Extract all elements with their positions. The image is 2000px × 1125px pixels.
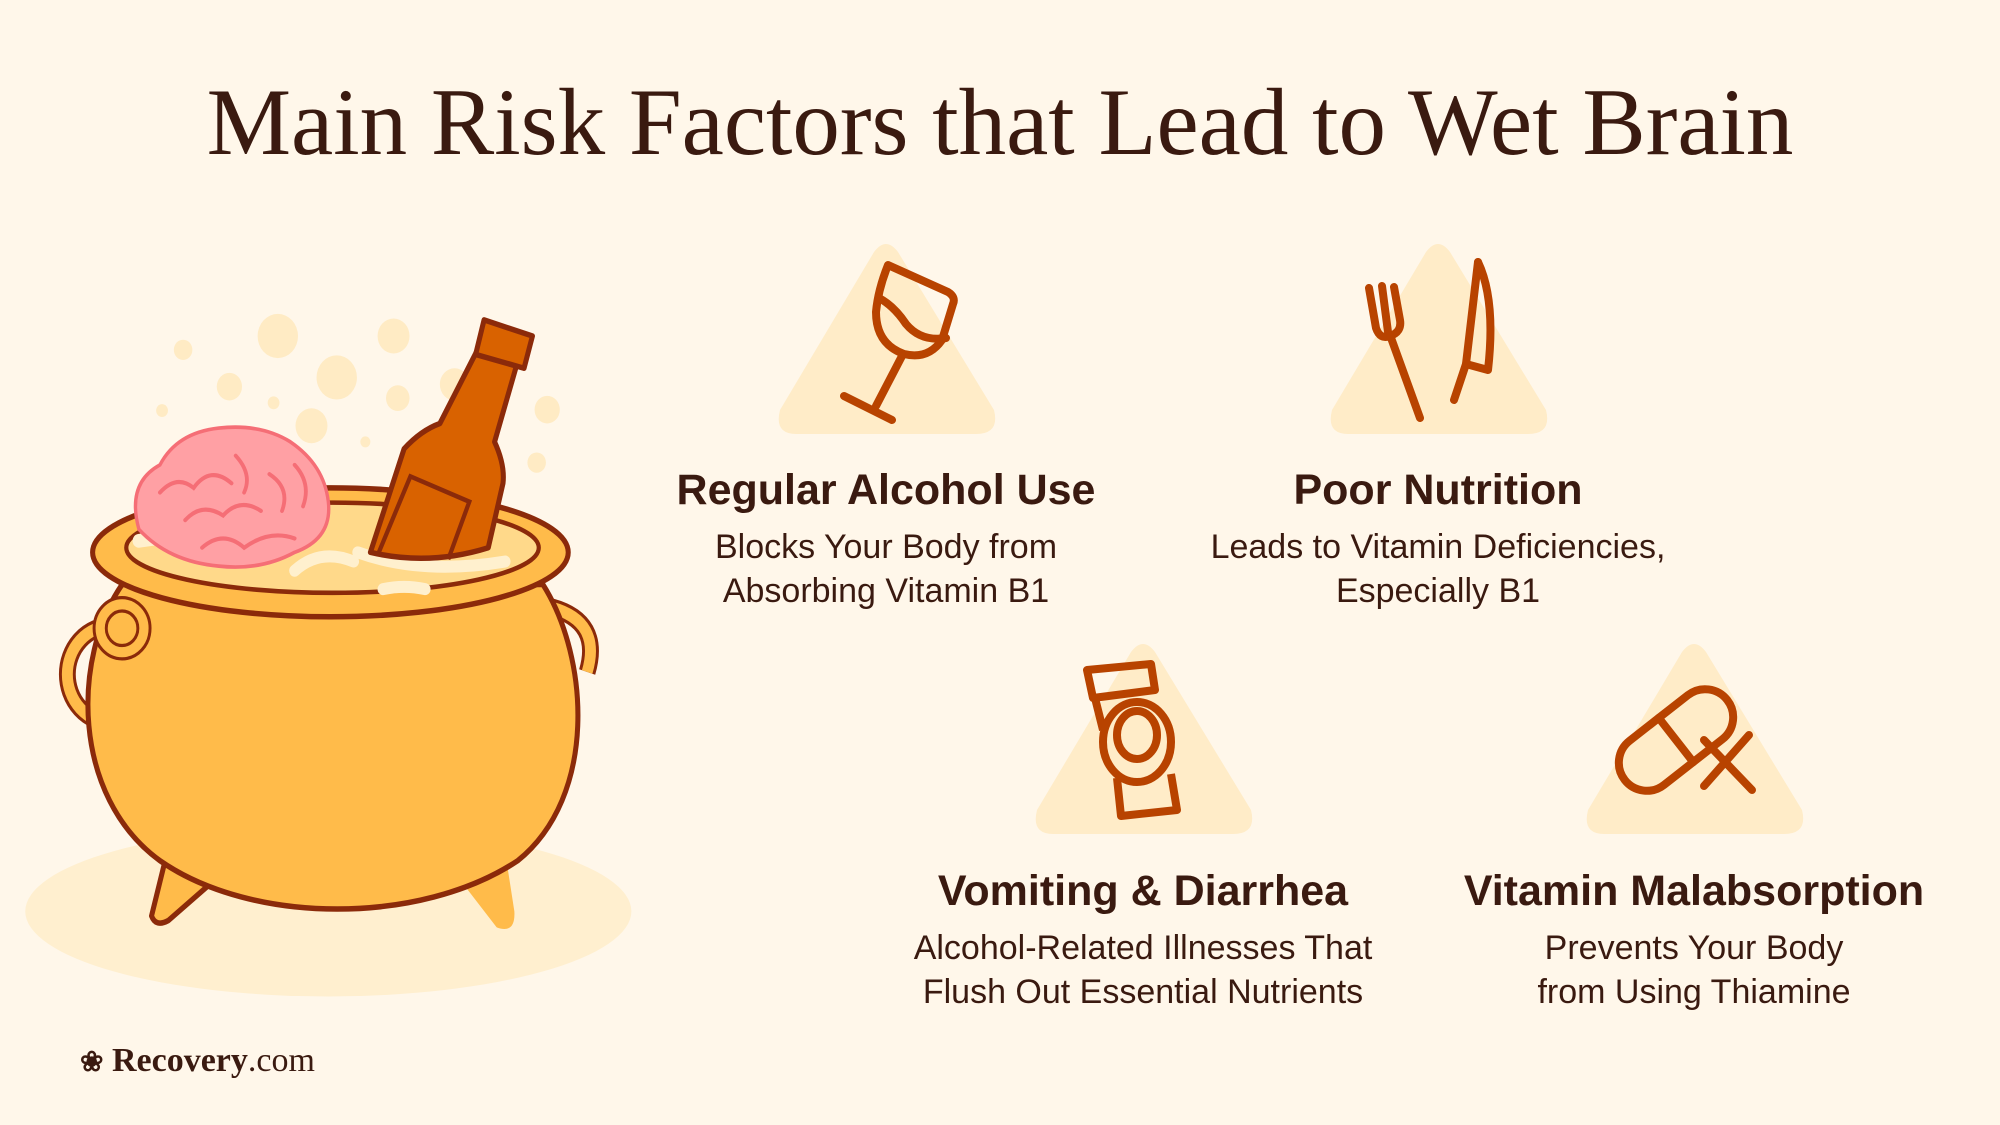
legs — [152, 856, 210, 923]
text: vomiting & diarrhea: Alcohol-Related Illnesses That — [914, 929, 1372, 967]
text: regular alcohol use: Regular Alcohol Use — [677, 466, 1095, 514]
icon: toilet warning — [1036, 644, 1252, 834]
text: vitamin malabsorption: from Using Thiamine — [1537, 973, 1851, 1011]
text: vitamin malabsorption: Prevents Your Body — [1545, 929, 1843, 967]
text: poor nutrition — [1211, 466, 1665, 610]
logo: ❀ Recovery.com — [80, 1042, 315, 1079]
title: Main Risk Factors that Lead to Wet Brain — [207, 69, 1793, 175]
text: vitamin malabsorption: Vitamin Malabsorption — [1464, 867, 1924, 915]
brain — [135, 427, 329, 567]
rim — [93, 488, 568, 617]
text: vitamin malabsorption — [1464, 867, 1924, 1011]
icon: pill warning — [1586, 644, 1804, 834]
handles — [67, 626, 156, 723]
text: vomiting & diarrhea: Flush Out Essential Nutrients — [923, 973, 1363, 1011]
text: poor nutrition: Especially B1 — [1336, 572, 1540, 610]
text: poor nutrition: Poor Nutrition — [1293, 466, 1582, 514]
illustration: cauldron with brain and bottle — [25, 314, 632, 996]
icon: wine glass warning — [778, 244, 996, 434]
bubbles — [156, 314, 560, 473]
text: vomiting & diarrhea: Vomiting & Diarrhea — [938, 867, 1348, 915]
icon: fork and knife warning — [1330, 244, 1548, 434]
text: poor nutrition: Leads to Vitamin Deficiencies, — [1211, 528, 1665, 566]
text: regular alcohol use: Blocks Your Body from — [715, 528, 1057, 566]
text: regular alcohol use — [677, 466, 1095, 610]
body — [88, 585, 578, 909]
shadow — [25, 826, 631, 996]
text: regular alcohol use: Absorbing Vitamin B1 — [723, 572, 1049, 610]
text: vomiting & diarrhea — [914, 867, 1372, 1011]
bottle — [370, 320, 532, 559]
